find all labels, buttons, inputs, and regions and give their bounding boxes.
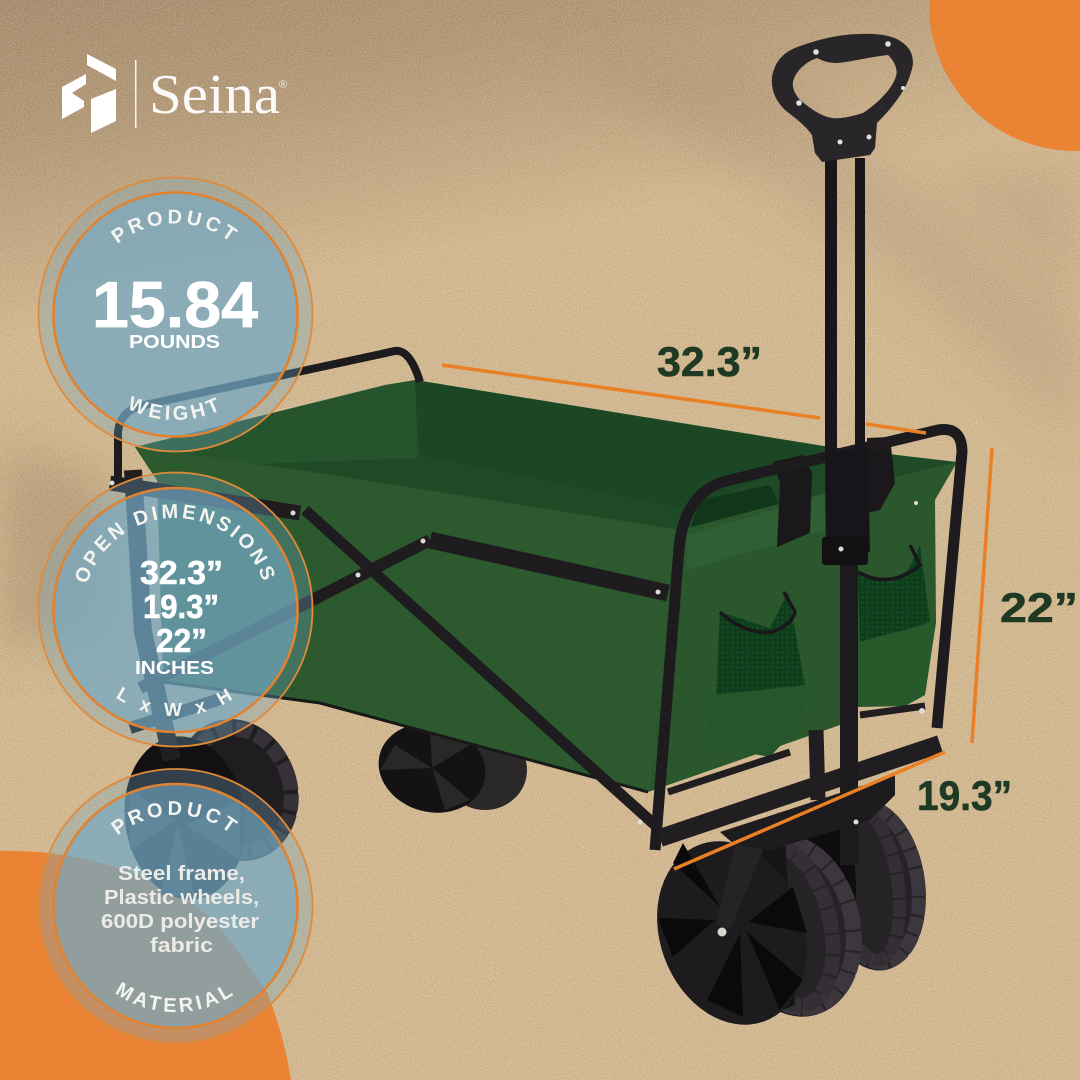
rear fabric interior <box>135 380 957 540</box>
curved label: weight: WEIGHT <box>130 396 217 420</box>
dimensions values: 19.3” <box>143 588 219 625</box>
fabric bottom edge <box>163 682 648 792</box>
curved label: open dimensions: OPEN DIMENSIONS <box>76 504 274 582</box>
material description <box>101 863 259 957</box>
dimension line: width <box>674 752 945 869</box>
material description: Plastic wheels, <box>104 887 259 909</box>
curved label: product: PRODUCT <box>110 210 238 244</box>
material description: 600D polyester <box>101 911 259 933</box>
material description: Steel frame, <box>118 863 245 885</box>
logo wordmark: Seina <box>149 64 280 126</box>
dimensions unit: INCHES <box>135 657 214 678</box>
curved label: product: PRODUCT <box>110 801 238 835</box>
curved label: material: MATERIAL <box>116 982 233 1012</box>
dimension line: height <box>972 448 992 743</box>
dimension line: length <box>442 365 926 433</box>
logo <box>62 54 287 133</box>
right pocket <box>858 545 936 706</box>
registered mark: ® <box>279 79 287 91</box>
material description: fabric <box>150 935 213 957</box>
telescoping handle <box>772 34 913 865</box>
dimensions values: 32.3” <box>140 554 223 591</box>
dimensions values <box>140 554 223 659</box>
dimension label: height: 22” <box>1000 584 1078 631</box>
fabric front panel <box>135 447 680 792</box>
logo mark <box>62 54 116 133</box>
front wheel <box>632 818 880 1046</box>
logo divider <box>135 60 136 128</box>
fabric rim band <box>687 495 825 570</box>
badge: open dimensions <box>38 472 314 748</box>
badge: product weight <box>38 176 314 452</box>
rear frame rail <box>118 351 420 480</box>
fabric right panel <box>648 462 957 792</box>
wagon <box>110 34 962 1046</box>
wheel axle bracket <box>720 775 895 850</box>
dimension label: width: 19.3” <box>917 772 1012 819</box>
orange circle top right <box>929 0 1080 151</box>
back middle wheel <box>368 712 527 824</box>
bottom frame <box>660 706 940 838</box>
straps <box>773 437 895 547</box>
dimension label: length: 32.3” <box>657 338 762 385</box>
orange circle bottom left <box>0 851 291 1080</box>
dimensions values: 22” <box>156 622 207 659</box>
curved label: l x w x h: L x W x H <box>116 686 232 716</box>
bolts <box>110 480 925 824</box>
rear right wheel <box>796 792 936 978</box>
scissor struts <box>110 483 668 825</box>
left folding leg <box>133 470 172 760</box>
weight value: 15.84 <box>92 268 258 341</box>
badge: product material <box>38 768 314 1044</box>
left pocket <box>705 592 806 757</box>
weight unit: POUNDS <box>129 331 220 352</box>
back left wheel <box>114 703 316 908</box>
front frame <box>655 429 962 850</box>
